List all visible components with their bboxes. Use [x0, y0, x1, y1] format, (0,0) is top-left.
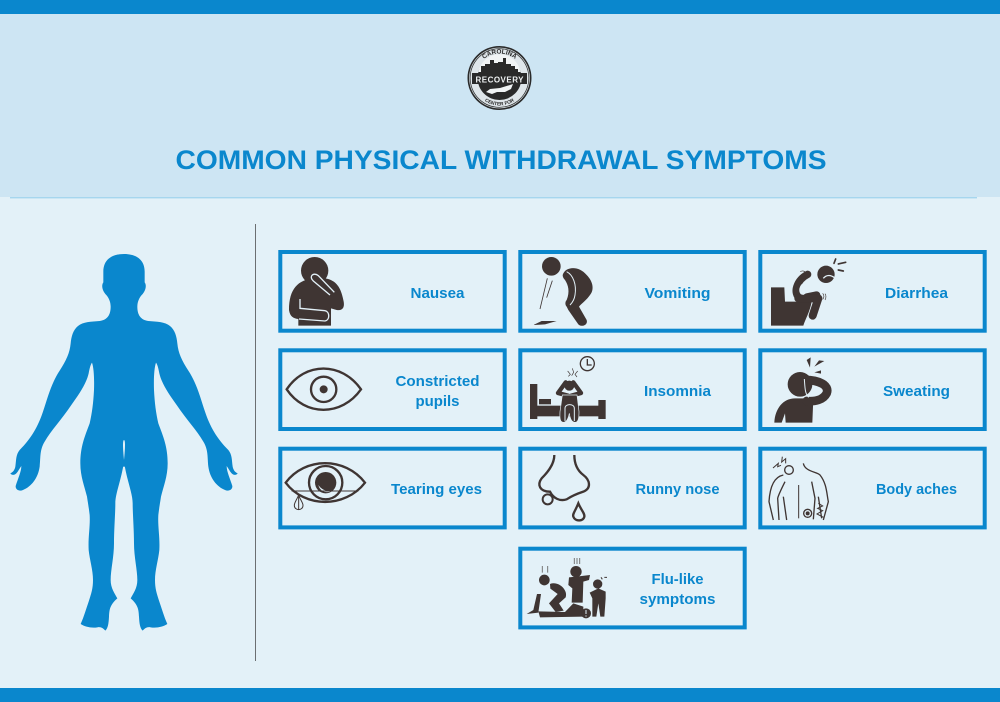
- card: constricted pupils: [280, 350, 505, 429]
- icon: person on toilet: [771, 259, 846, 326]
- icon: group of sick people: [527, 558, 607, 618]
- label: constricted pupils: pupils: [416, 393, 460, 410]
- logo: Carolina Recovery Center: [468, 46, 532, 110]
- label: constricted pupils: [396, 373, 480, 410]
- card: vomiting: [520, 252, 745, 331]
- card: diarrhea: [760, 252, 985, 331]
- card: sweating: [760, 350, 985, 429]
- icon: nose with drip: [539, 455, 589, 520]
- label: nausea: Nausea: [410, 285, 465, 302]
- human body silhouette: [10, 254, 238, 631]
- label: tearing eyes: Tearing eyes: [391, 481, 482, 498]
- card: tearing eyes: [280, 449, 505, 527]
- icon: person wiping forehead: [774, 357, 827, 423]
- label: flu-like symptoms: symptoms: [640, 591, 716, 608]
- title: COMMON PHYSICAL WITHDRAWAL SYMPTOMS: [176, 145, 826, 175]
- bottom bar: [0, 688, 1000, 702]
- header band: [0, 14, 1000, 197]
- logo: Carolina Recovery Center: CENTER FOR: [485, 98, 514, 106]
- label: sweating: Sweating: [883, 383, 950, 400]
- card: flu-like symptoms: [520, 549, 745, 627]
- label: body aches: Body aches: [876, 481, 957, 498]
- label: vomiting: Vomiting: [644, 285, 710, 302]
- icon: back with pain points: [769, 457, 828, 520]
- label: insomnia: Insomnia: [644, 383, 712, 400]
- icon: person awake on bed with clock: [530, 357, 606, 422]
- label: diarrhea: Diarrhea: [885, 285, 949, 302]
- card: runny nose: [520, 449, 745, 527]
- label: flu-like symptoms: [640, 571, 716, 608]
- card: insomnia: [520, 350, 745, 429]
- label: runny nose: Runny nose: [636, 481, 720, 498]
- label: constricted pupils: Constricted: [396, 373, 480, 390]
- top bar: [0, 0, 1000, 14]
- card: nausea: [280, 252, 505, 331]
- icon: person covering mouth: [289, 257, 344, 326]
- icon: eye with tear: [286, 463, 365, 510]
- logo: Carolina Recovery Center: CAROLINA: [482, 49, 516, 59]
- card: body aches: [760, 449, 985, 527]
- label: flu-like symptoms: Flu-like: [652, 571, 704, 588]
- icon: eye with small pupil: [287, 369, 361, 410]
- logo: Carolina Recovery Center: RECOVERY: [476, 76, 524, 84]
- icon: person vomiting: [533, 257, 593, 326]
